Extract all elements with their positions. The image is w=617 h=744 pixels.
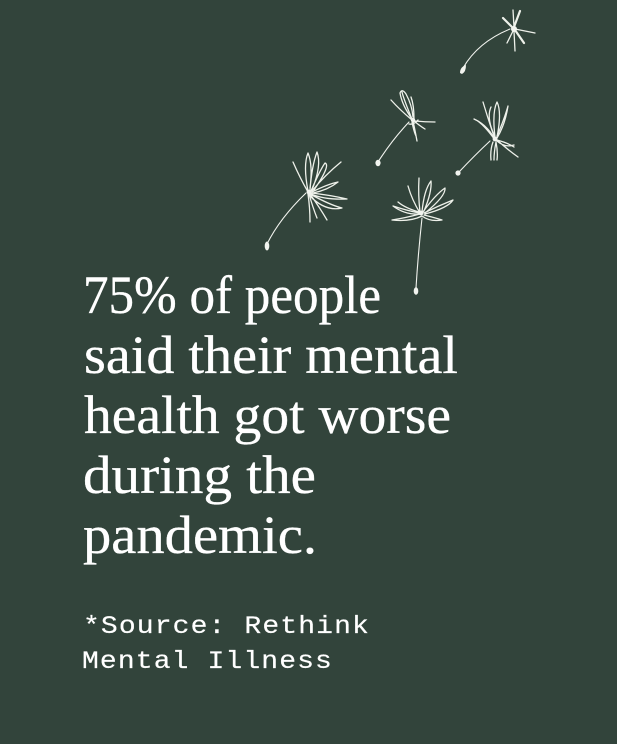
illustration: dandelion seed, middle right	[455, 102, 518, 176]
headline: said their mental	[84, 325, 458, 385]
headline	[83, 265, 458, 565]
headline: 75% of people	[83, 265, 381, 325]
source note: *Source: Rethink	[83, 612, 370, 641]
illustration: dandelion seed, top right	[460, 10, 535, 74]
headline: during the	[83, 445, 316, 505]
headline: pandemic.	[83, 505, 317, 565]
illustration: dandelion seed, bottom left	[265, 152, 347, 250]
illustration: dandelion seed, bottom centre	[392, 178, 453, 295]
headline: health got worse	[84, 385, 451, 445]
source note: Mental Illness	[82, 647, 333, 676]
illustration: dandelion seed, upper centre	[375, 91, 435, 166]
source note	[82, 612, 370, 676]
